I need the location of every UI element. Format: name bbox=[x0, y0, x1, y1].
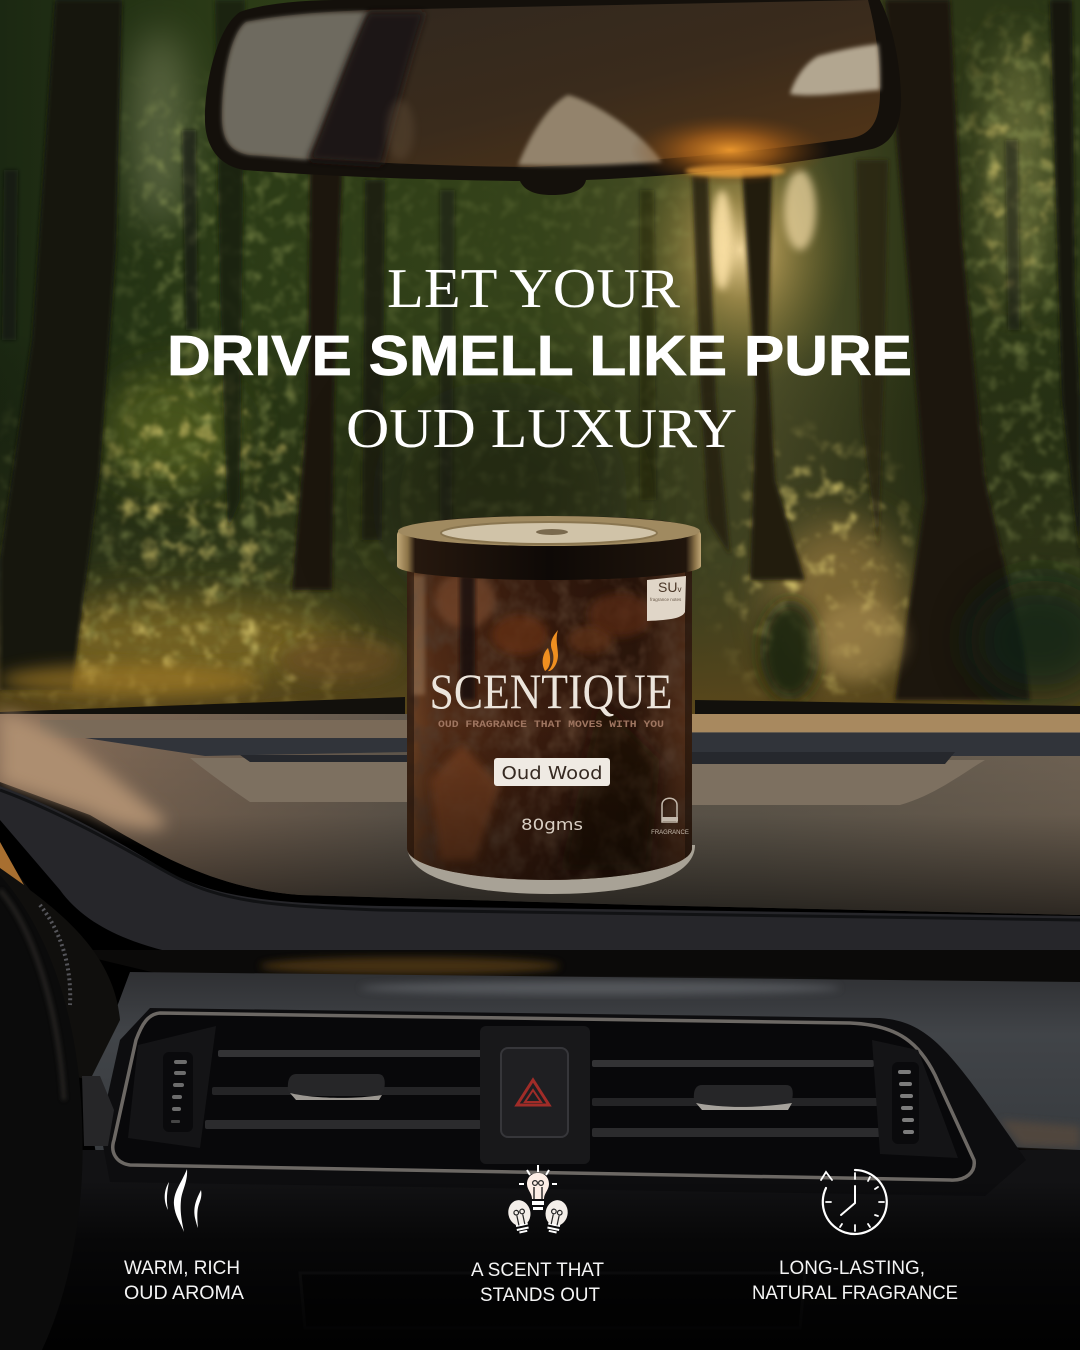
defrost vent strip bbox=[85, 733, 1080, 756]
sticker text: SUv bbox=[658, 579, 681, 595]
windshield base shadow bbox=[0, 697, 1080, 725]
dark vignette over lower console bbox=[0, 1180, 1080, 1350]
hazard button bbox=[501, 1048, 568, 1137]
caption: long lasting natural fragrance bbox=[752, 1257, 958, 1304]
climate controls ghost bbox=[300, 1273, 805, 1328]
steering wheel rim bbox=[0, 875, 83, 1350]
mirror reflection: pillar bbox=[308, 12, 425, 165]
variety label: Oud Wood bbox=[502, 764, 602, 784]
seal mark: FRAGRANCE bbox=[651, 830, 689, 836]
net weight: 80gms bbox=[521, 815, 583, 834]
caption: a scent that stands out bbox=[471, 1259, 604, 1306]
seal mark bbox=[651, 798, 689, 836]
dashboard seam lines bbox=[0, 790, 1080, 920]
icon: smoke wisps bbox=[165, 1169, 201, 1232]
caption: warm rich oud aroma bbox=[124, 1257, 244, 1304]
sticker fine print: fragrance notes bbox=[650, 597, 682, 602]
vent bezel bbox=[113, 1013, 974, 1180]
steering wheel and gauge bbox=[0, 842, 120, 1350]
vent surround bbox=[100, 1008, 1026, 1196]
hazard switch housing bbox=[480, 1026, 590, 1164]
headline line 2: DRIVE SMELL LIKE PURE bbox=[167, 324, 912, 388]
variety label bbox=[494, 758, 610, 786]
tagline: OUD FRAGRANCE THAT MOVES WITH YOU bbox=[438, 720, 664, 731]
product can bbox=[397, 516, 701, 894]
caption: long lasting natural fragrance: NATURAL FRAGRANCE bbox=[752, 1282, 958, 1304]
lid top bbox=[398, 516, 700, 546]
caption: warm rich oud aroma: OUD AROMA bbox=[124, 1282, 244, 1304]
foliage shadow and lower glow bbox=[0, 380, 1080, 700]
brand name: SCENTIQUE bbox=[430, 663, 672, 719]
can body bbox=[407, 571, 692, 880]
dark gap bbox=[60, 950, 1080, 984]
stalk bbox=[82, 1076, 114, 1146]
feature: long lasting bbox=[752, 1170, 958, 1304]
center console panel bbox=[0, 972, 1080, 1350]
gauge cluster bbox=[0, 850, 120, 1080]
can base rim bbox=[407, 845, 695, 894]
icon: clock bbox=[821, 1170, 887, 1234]
headline line 1: LET YOUR bbox=[387, 258, 681, 320]
lower console bbox=[0, 1150, 1080, 1350]
dashboard surface bbox=[0, 714, 1080, 915]
flame logo bbox=[543, 630, 558, 671]
feature: scent that stands out bbox=[471, 1165, 604, 1306]
feature: warm aroma bbox=[124, 1169, 244, 1304]
mirror housing bbox=[205, 0, 901, 195]
warm left surface bbox=[0, 712, 165, 829]
mirror glass bbox=[222, 0, 880, 167]
mirror reflection: dome light bbox=[790, 44, 880, 95]
hazard triangle bbox=[517, 1080, 549, 1105]
caption: warm rich oud aroma: WARM, RICH bbox=[124, 1257, 240, 1279]
mirror reflection: center wedge bbox=[518, 95, 662, 166]
left side vent control bbox=[128, 1026, 216, 1148]
rear-view mirror bbox=[205, 0, 901, 195]
vent clip left bbox=[288, 1074, 385, 1100]
mirror reflection: left window bbox=[222, 12, 368, 160]
can lid bbox=[397, 516, 701, 580]
caption: a scent that stands out: STANDS OUT bbox=[480, 1284, 600, 1306]
dashboard lower lip bbox=[0, 786, 1080, 970]
caption: a scent that stands out: A SCENT THAT bbox=[471, 1259, 604, 1281]
forest background bbox=[0, 0, 1080, 715]
headline bbox=[167, 258, 912, 460]
vent slats left bbox=[205, 1050, 482, 1129]
caption: long lasting natural fragrance: LONG-LASTING, bbox=[779, 1257, 925, 1279]
trees bbox=[0, 0, 1080, 700]
icon: three light bulbs bbox=[506, 1165, 570, 1235]
vent slats right bbox=[592, 1060, 880, 1137]
right side vent control bbox=[872, 1040, 958, 1158]
dashboard top bbox=[0, 697, 1080, 984]
sticker bbox=[647, 576, 686, 621]
display recess bbox=[190, 758, 985, 805]
vent clip right bbox=[694, 1085, 793, 1110]
headline line 3: OUD LUXURY bbox=[346, 398, 737, 460]
